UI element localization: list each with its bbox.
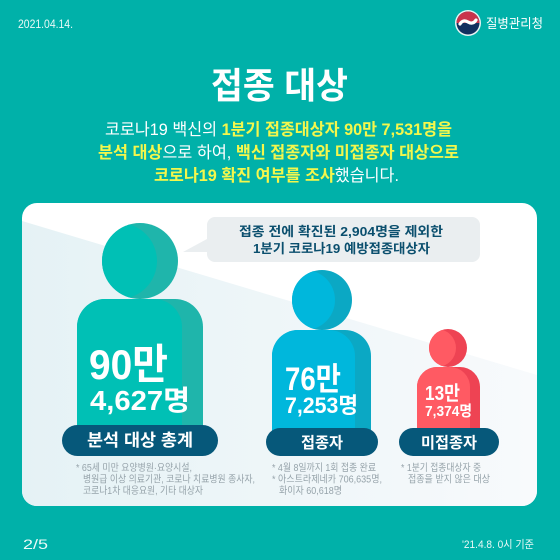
- note: analysis total: [76, 462, 255, 497]
- note: vaccinated: * 4월 8일까지 1회 접종 완료: [272, 462, 376, 474]
- label pill: unvaccinated: [399, 428, 499, 456]
- logo: Korea Disease Control and Prevention Agency: [455, 10, 543, 36]
- person: vaccinated: [272, 270, 371, 432]
- base date: '21.4.8. 0시 기준: [462, 538, 534, 551]
- label pill: vaccinated: 접종자: [301, 434, 343, 452]
- note: analysis total: * 65세 미만 요양병원·요양시설,: [76, 462, 192, 474]
- title: 접종 대상: [211, 65, 348, 106]
- note: vaccinated: * 아스트라제네카 706,635명,: [272, 474, 382, 486]
- callout: 1분기 코로나19 예방접종대상자: [253, 241, 430, 256]
- page number: 2/5: [23, 536, 48, 552]
- note: vaccinated: [272, 462, 382, 497]
- label pill: unvaccinated: 미접종자: [421, 434, 477, 452]
- intro text: 코로나19 백신의 1분기 접종대상자 90만 7,531명을: [105, 120, 452, 139]
- person: unvaccinated: 7,374명: [425, 403, 472, 420]
- intro text: 분석 대상으로 하여, 백신 접종자와 미접종자 대상으로: [98, 143, 459, 162]
- date: 2021.04.14.: [18, 19, 73, 31]
- person: analysis total: [77, 223, 203, 430]
- intro text: 코로나19 확진 여부를 조사했습니다.: [154, 166, 399, 185]
- note: analysis total: 병원급 이상 의료기관, 코로나 치료병원 종사자,: [83, 474, 255, 486]
- label pill: analysis total: 분석 대상 총계: [87, 431, 193, 450]
- intro text: [98, 120, 459, 185]
- person: unvaccinated: [417, 329, 480, 432]
- person: analysis total: 90만: [89, 341, 168, 388]
- callout: 접종 전에 확진된 2,904명을 제외한: [239, 224, 443, 239]
- person: analysis total: 4,627명: [90, 385, 190, 416]
- note: unvaccinated: 접종을 받지 않은 대상: [408, 474, 490, 486]
- person: vaccinated: 7,253명: [285, 393, 358, 418]
- note: unvaccinated: [401, 462, 490, 486]
- label pill: analysis total: [62, 425, 218, 456]
- person: unvaccinated: 13만: [425, 382, 460, 405]
- label pill: vaccinated: [266, 428, 378, 456]
- note: vaccinated: 화이자 60,618명: [279, 485, 342, 497]
- note: unvaccinated: * 1분기 접종대상자 중: [401, 462, 481, 474]
- person: vaccinated: 76만: [285, 361, 341, 397]
- panel: chart card: [22, 203, 537, 506]
- note: analysis total: 코로나1차 대응요원, 기타 대상자: [83, 485, 203, 497]
- callout: [183, 217, 480, 262]
- logo: Korea Disease Control and Prevention Agency: 질병관리청: [486, 16, 543, 31]
